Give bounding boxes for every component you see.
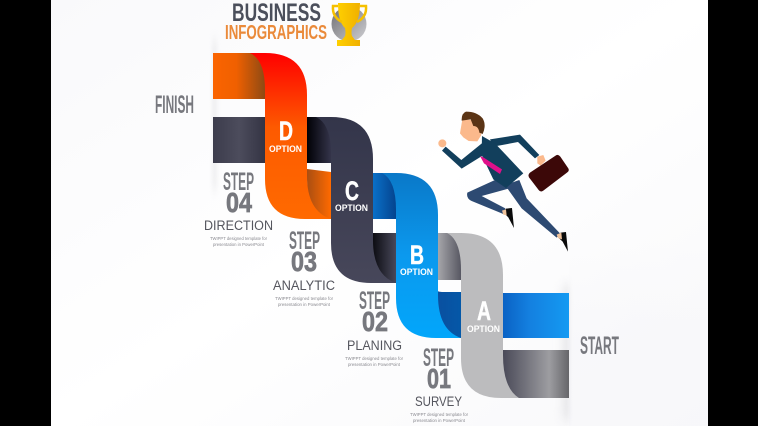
option C label: C (345, 176, 359, 206)
step 02 text block: TWIPPT designed template for (345, 356, 403, 361)
ribbon D: orange (213, 53, 331, 219)
icon: trophy (332, 3, 366, 46)
text: START (580, 332, 619, 360)
option A label (467, 296, 500, 335)
step 02 text block: PLANING (347, 338, 402, 353)
step 01 text block: TWIPPT designed template for (410, 412, 468, 417)
back leg (467, 180, 513, 214)
step 04 text block: presentation in PowerPoint (213, 242, 265, 247)
ribbon B: blue (373, 173, 461, 338)
ribbon A: grey (438, 233, 569, 398)
step 03 text block: TWIPPT designed template for (275, 296, 333, 301)
right arm (490, 135, 539, 158)
option B label: B (410, 240, 424, 270)
option C label: OPTION (335, 203, 368, 214)
step 01 text block: 01 (427, 363, 451, 394)
front leg (505, 180, 560, 238)
option D label (269, 116, 302, 155)
shirt and tie (479, 136, 482, 145)
jacket (482, 136, 523, 188)
ribbon C: dark navy (307, 117, 396, 283)
option D label: OPTION (269, 144, 302, 155)
skin ankles (502, 209, 562, 239)
step 02 text block: 02 (362, 306, 388, 337)
step 01 text block: SURVEY (415, 394, 462, 409)
step 03 text block: STEP (289, 227, 320, 255)
step 02 text block: presentation in PowerPoint (348, 362, 401, 367)
option B label: OPTION (400, 267, 433, 278)
step 02 text block (345, 287, 403, 367)
option D label: D (279, 116, 293, 146)
step 03 text block (273, 227, 335, 307)
briefcase (529, 155, 569, 192)
running businessman illustration (438, 112, 569, 252)
head (460, 119, 481, 141)
step 02 text block: STEP (359, 287, 390, 315)
step 04 text block: 04 (226, 187, 252, 218)
hair (462, 112, 485, 134)
hands (438, 139, 446, 147)
step 01 text block: STEP (423, 344, 454, 372)
title (225, 0, 327, 44)
title: INFOGRAPHICS (225, 22, 327, 44)
step 03 text block: ANALYTIC (273, 278, 335, 293)
step 04 text block: STEP (223, 168, 254, 196)
option B label (400, 240, 433, 278)
step 01 text block: presentation in PowerPoint (413, 418, 466, 423)
step 04 text block: TWIPPT designed template for (210, 236, 267, 241)
left arm (442, 142, 492, 169)
step 01 text block (410, 344, 468, 423)
step 04 text block (204, 168, 273, 247)
option A label: OPTION (467, 324, 500, 335)
option C label (335, 176, 368, 214)
step 03 text block: presentation in PowerPoint (278, 302, 331, 307)
step 04 text block: DIRECTION (204, 218, 273, 233)
text: FINISH (155, 91, 194, 119)
step 03 text block: 03 (291, 246, 317, 277)
shoes (503, 208, 568, 252)
option A label: A (477, 296, 491, 326)
